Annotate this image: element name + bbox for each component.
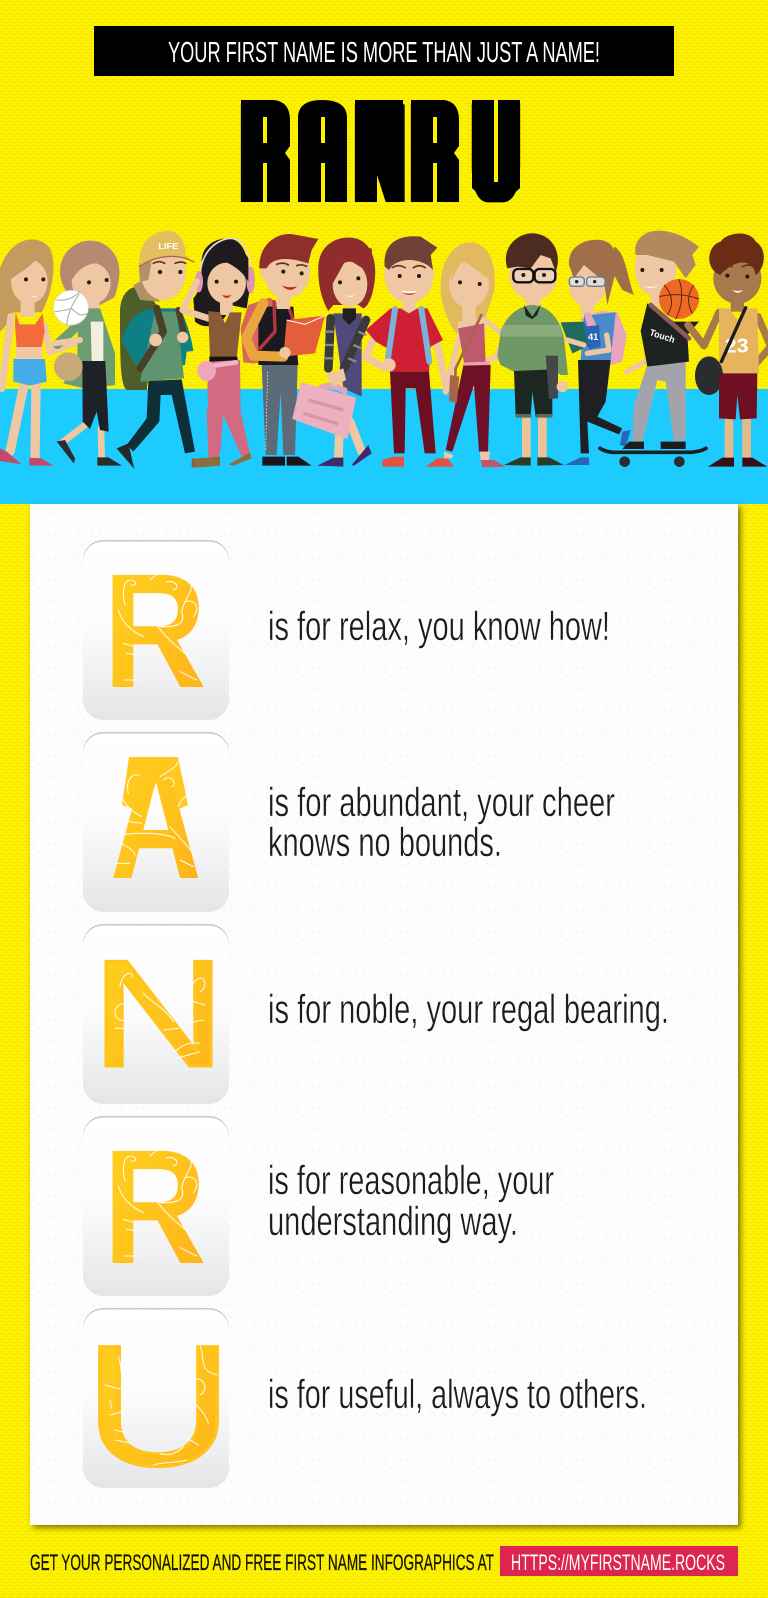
text: A meaning	[268, 779, 615, 865]
row 2: letter A	[83, 725, 615, 914]
text: R meaning: understanding way.	[268, 1198, 518, 1244]
character: girl with volleyball	[54, 241, 122, 466]
text: A meaning: knows no bounds.	[268, 819, 502, 865]
text: R meaning: is for relax, you know how!	[268, 603, 610, 649]
white content panel	[30, 504, 738, 1525]
group of twelve cartoon people	[0, 231, 768, 469]
character: boy in yellow jersey: 23	[725, 334, 749, 357]
character: red-haired girl with pink bag	[293, 238, 375, 467]
letter card U: U	[84, 1310, 233, 1502]
letter card N: N	[91, 930, 226, 1099]
character: blonde girl	[441, 242, 506, 467]
text: R meaning	[268, 1157, 554, 1244]
title: name: R	[244, 77, 282, 231]
character: girl in orange top	[0, 239, 78, 466]
row 5: letter U	[83, 1308, 647, 1502]
character: girl with glasses and ponytail	[561, 240, 634, 465]
row 1: letter R	[83, 539, 610, 722]
row 4: letter R	[83, 1115, 554, 1298]
title: name	[241, 74, 520, 232]
character: skateboarder with basketball	[600, 231, 706, 467]
letter card A	[83, 725, 229, 914]
text: A meaning: is for abundant, your cheer	[268, 779, 615, 825]
text: R meaning: is for reasonable, your	[268, 1157, 554, 1203]
character: girl with headphones	[183, 238, 255, 468]
character: backpacker in cap	[117, 231, 220, 469]
title: name: R	[414, 77, 452, 231]
footer call to action text: GET YOUR PERSONALIZED AND FREE FIRST NAME INFOGRAPHICS AT	[30, 1550, 494, 1575]
letter card R: R	[103, 539, 207, 722]
character: boy in red shirt	[366, 236, 454, 467]
character: skateboarder with basketball: Touch	[648, 327, 676, 345]
character: boy with book	[241, 234, 325, 466]
character: boy in yellow jersey	[688, 234, 768, 467]
blue floor band	[0, 389, 768, 504]
title: name: N	[358, 75, 402, 231]
top banner	[94, 26, 674, 76]
character: girl with glasses and ponytail: 41	[588, 332, 598, 342]
title: name: U	[475, 74, 517, 230]
row 3: letter N	[83, 924, 669, 1104]
character: boy with black glasses	[497, 233, 568, 466]
title: name: A	[305, 77, 340, 232]
letter card A: A	[110, 725, 202, 914]
character: backpacker in cap: LIFE	[158, 241, 179, 251]
letter card R: R	[103, 1115, 207, 1298]
